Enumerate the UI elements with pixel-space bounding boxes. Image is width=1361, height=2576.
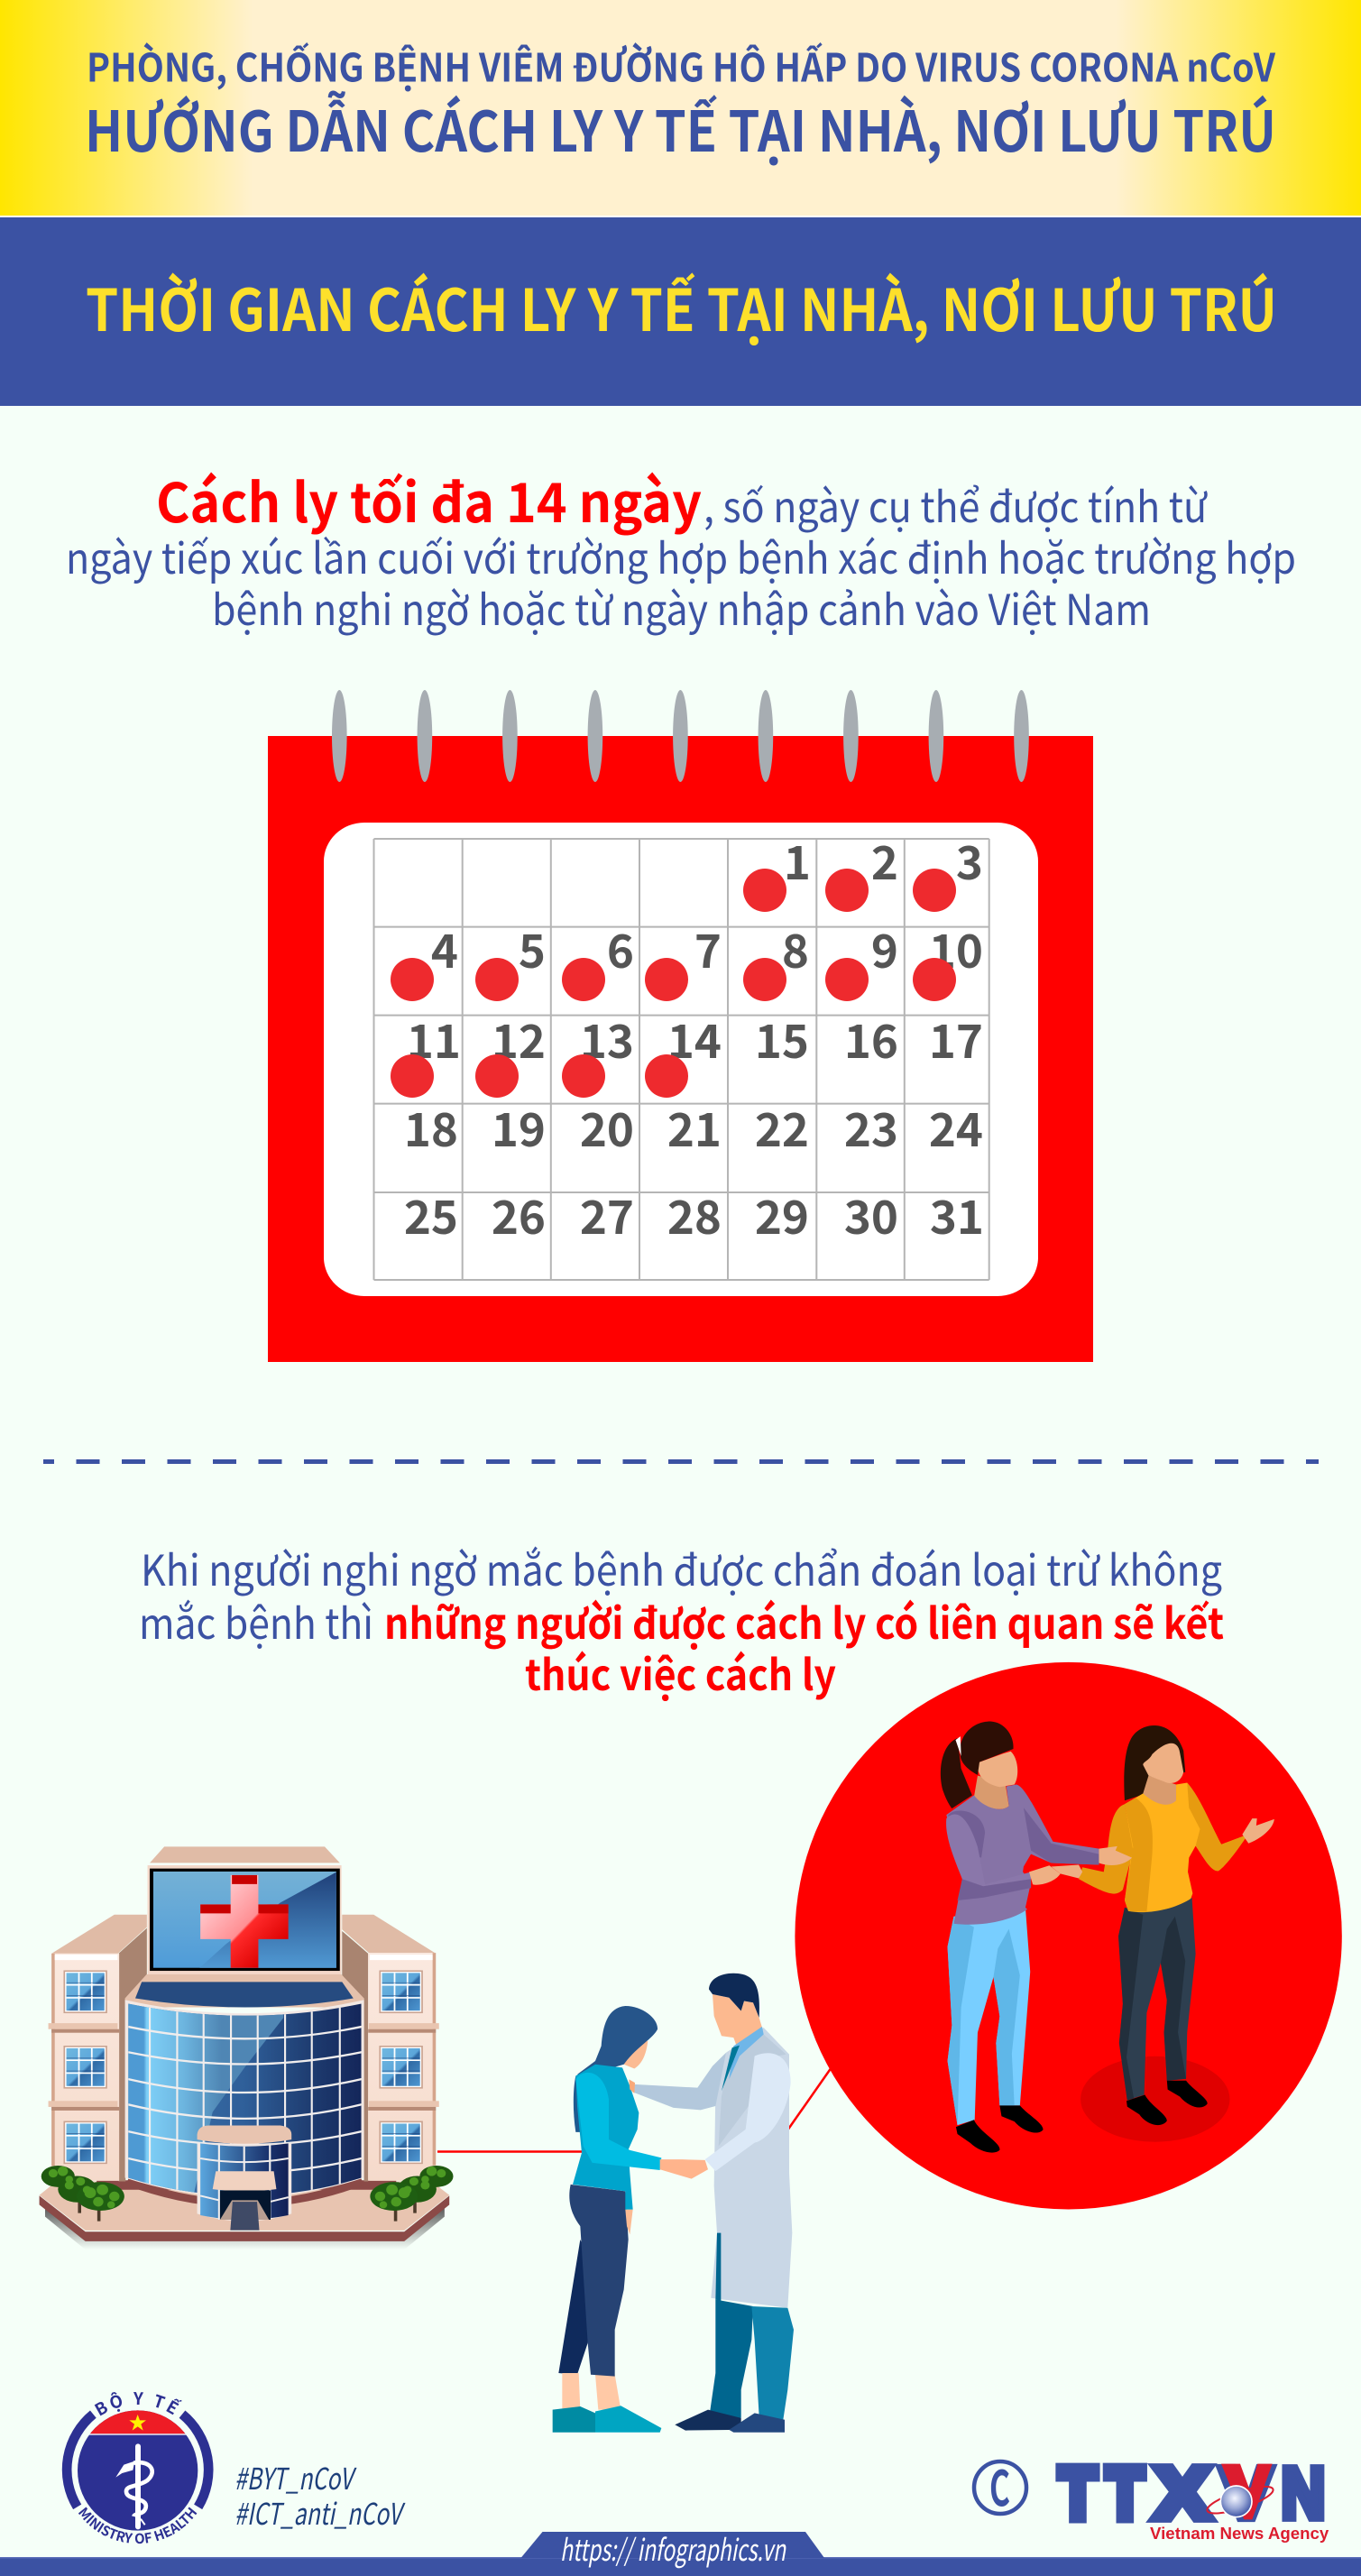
TTXVN letters <box>1060 2452 1325 2533</box>
agency name: Vietnam News Agency <box>1150 2524 1329 2543</box>
logo: copyright mark: C <box>989 2449 1010 2520</box>
emblem star <box>129 2415 146 2431</box>
calendar day numbers: 24 <box>929 1093 983 1160</box>
hospital ground platform <box>40 2180 449 2249</box>
hospital right wing <box>342 1915 439 2182</box>
calendar day numbers: 10 <box>929 915 983 981</box>
second paragraph: thúc việc cách ly <box>525 1641 836 1703</box>
TTXVN letters: V <box>1220 2452 1272 2533</box>
second paragraph: Khi người nghi ngờ mắc bệnh được chẩn đoán loại trừ không <box>141 1536 1222 1598</box>
intro paragraph <box>66 460 1296 638</box>
hospital trees right <box>370 2166 453 2222</box>
header title line 1: PHÒNG, CHỐNG BỆNH VIÊM ĐƯỜNG HÔ HẤP DO VIRUS CORONA nCoV <box>87 38 1275 94</box>
hashtags: #BYT_nCoV <box>234 2455 357 2498</box>
red circle with two women <box>795 1662 1342 2209</box>
calendar day numbers: 21 <box>667 1093 722 1160</box>
emblem rod and serpent <box>115 2443 152 2529</box>
globe <box>1220 2486 1252 2517</box>
intro paragraph: , số ngày cụ thể được tính từ <box>703 473 1208 535</box>
calendar day numbers: 13 <box>580 1005 634 1072</box>
hospital trees left <box>41 2166 124 2222</box>
red circle <box>795 1662 1342 2209</box>
connector: hospital to patient <box>437 2150 583 2153</box>
calendar body <box>268 736 1093 1362</box>
intro paragraph: Cách ly tối đa 14 ngày <box>156 460 702 538</box>
calendar day numbers: 26 <box>492 1181 546 1247</box>
footer tab <box>521 2532 824 2558</box>
calendar day numbers: 6 <box>607 915 634 981</box>
section heading band <box>0 217 1361 406</box>
calendar day numbers: 31 <box>930 1181 984 1247</box>
calendar day numbers: 11 <box>407 1005 461 1072</box>
calendar day numbers: 15 <box>755 1005 809 1072</box>
calendar day numbers: 23 <box>844 1093 898 1160</box>
hospital upper canopy <box>125 1974 364 2008</box>
second paragraph: mắc bệnh thì <box>139 1589 373 1651</box>
TTXVN letters: T <box>1107 2452 1144 2533</box>
hospital entrance <box>198 2126 291 2231</box>
calendar day numbers: 12 <box>492 1005 546 1072</box>
calendar white panel <box>324 823 1038 1296</box>
red day markers <box>391 869 956 1098</box>
TTXVN letters: T <box>1060 2452 1096 2533</box>
red V inlay <box>1221 2464 1273 2519</box>
TTXVN letters: X <box>1155 2452 1209 2533</box>
hospital left wing <box>49 1915 147 2182</box>
section heading text: THỜI GIAN CÁCH LY Y TẾ TẠI NHÀ, NƠI LƯU TRÚ <box>86 265 1277 348</box>
calendar day numbers: 5 <box>519 915 546 981</box>
calendar day numbers: 17 <box>929 1005 983 1072</box>
calendar day numbers: 20 <box>580 1093 634 1160</box>
calendar day numbers: 27 <box>580 1181 634 1247</box>
hashtags <box>234 2455 406 2534</box>
logo: copyright mark <box>974 2449 1026 2520</box>
calendar day numbers: 29 <box>755 1181 809 1247</box>
hospital glass rotunda <box>125 2000 364 2211</box>
hospital rooftop sign with red cross <box>148 1846 342 1974</box>
calendar rings <box>332 690 1029 782</box>
calendar day numbers: 16 <box>844 1005 898 1072</box>
calendar day numbers: 30 <box>844 1181 898 1247</box>
calendar day numbers: 3 <box>956 826 983 893</box>
emblem side arcs <box>67 2415 208 2507</box>
second paragraph: những người được cách ly có liên quan sẽ kết <box>384 1589 1224 1651</box>
clasped hands <box>1029 1846 1132 1885</box>
calendar day numbers: 14 <box>667 1005 722 1072</box>
shadow on floor <box>1081 2056 1230 2142</box>
calendar day numbers: 19 <box>492 1093 546 1160</box>
calendar day numbers: 7 <box>694 915 722 981</box>
woman in yellow <box>1079 1725 1274 2125</box>
TTXVN letters: N <box>1282 2452 1325 2533</box>
calendar day numbers <box>404 826 984 1247</box>
calendar day numbers: 1 <box>784 826 811 893</box>
emblem text top: BỘ Y TẾ <box>94 2392 182 2415</box>
orbit <box>1205 2481 1275 2518</box>
calendar grid <box>373 839 989 1280</box>
calendar day numbers: 25 <box>404 1181 458 1247</box>
calendar day numbers: 28 <box>667 1181 722 1247</box>
intro paragraph: bệnh nghi ngờ hoặc từ ngày nhập cảnh vào Việt Nam <box>212 575 1151 638</box>
calendar day numbers: 18 <box>404 1093 458 1160</box>
calendar day numbers: 4 <box>431 915 458 981</box>
doctor <box>634 1973 794 2433</box>
emblem disc <box>75 2408 201 2532</box>
logo: TTXVN <box>1060 2452 1329 2543</box>
handshake <box>660 2159 708 2179</box>
header band <box>0 0 1361 217</box>
calendar <box>268 690 1093 1362</box>
patient <box>553 2006 661 2433</box>
hashtags: #ICT_anti_nCoV <box>234 2490 406 2534</box>
woman in purple <box>941 1722 1099 2153</box>
connector: doctor to circle <box>782 2067 832 2139</box>
illustration: patient and doctor <box>553 1973 794 2433</box>
calendar day numbers: 8 <box>782 915 809 981</box>
second paragraph <box>139 1536 1224 1703</box>
calendar day numbers: 22 <box>755 1093 809 1160</box>
logo: Ministry of Health emblem <box>61 2392 214 2544</box>
emblem text bottom: MINISTRY OF HEALTH <box>78 2507 197 2544</box>
calendar day numbers: 9 <box>871 915 898 981</box>
calendar day numbers: 2 <box>871 826 898 893</box>
footer url: https:// infographics.vn <box>560 2526 786 2570</box>
icon: hospital <box>40 1846 453 2249</box>
footer band <box>0 2526 1361 2576</box>
